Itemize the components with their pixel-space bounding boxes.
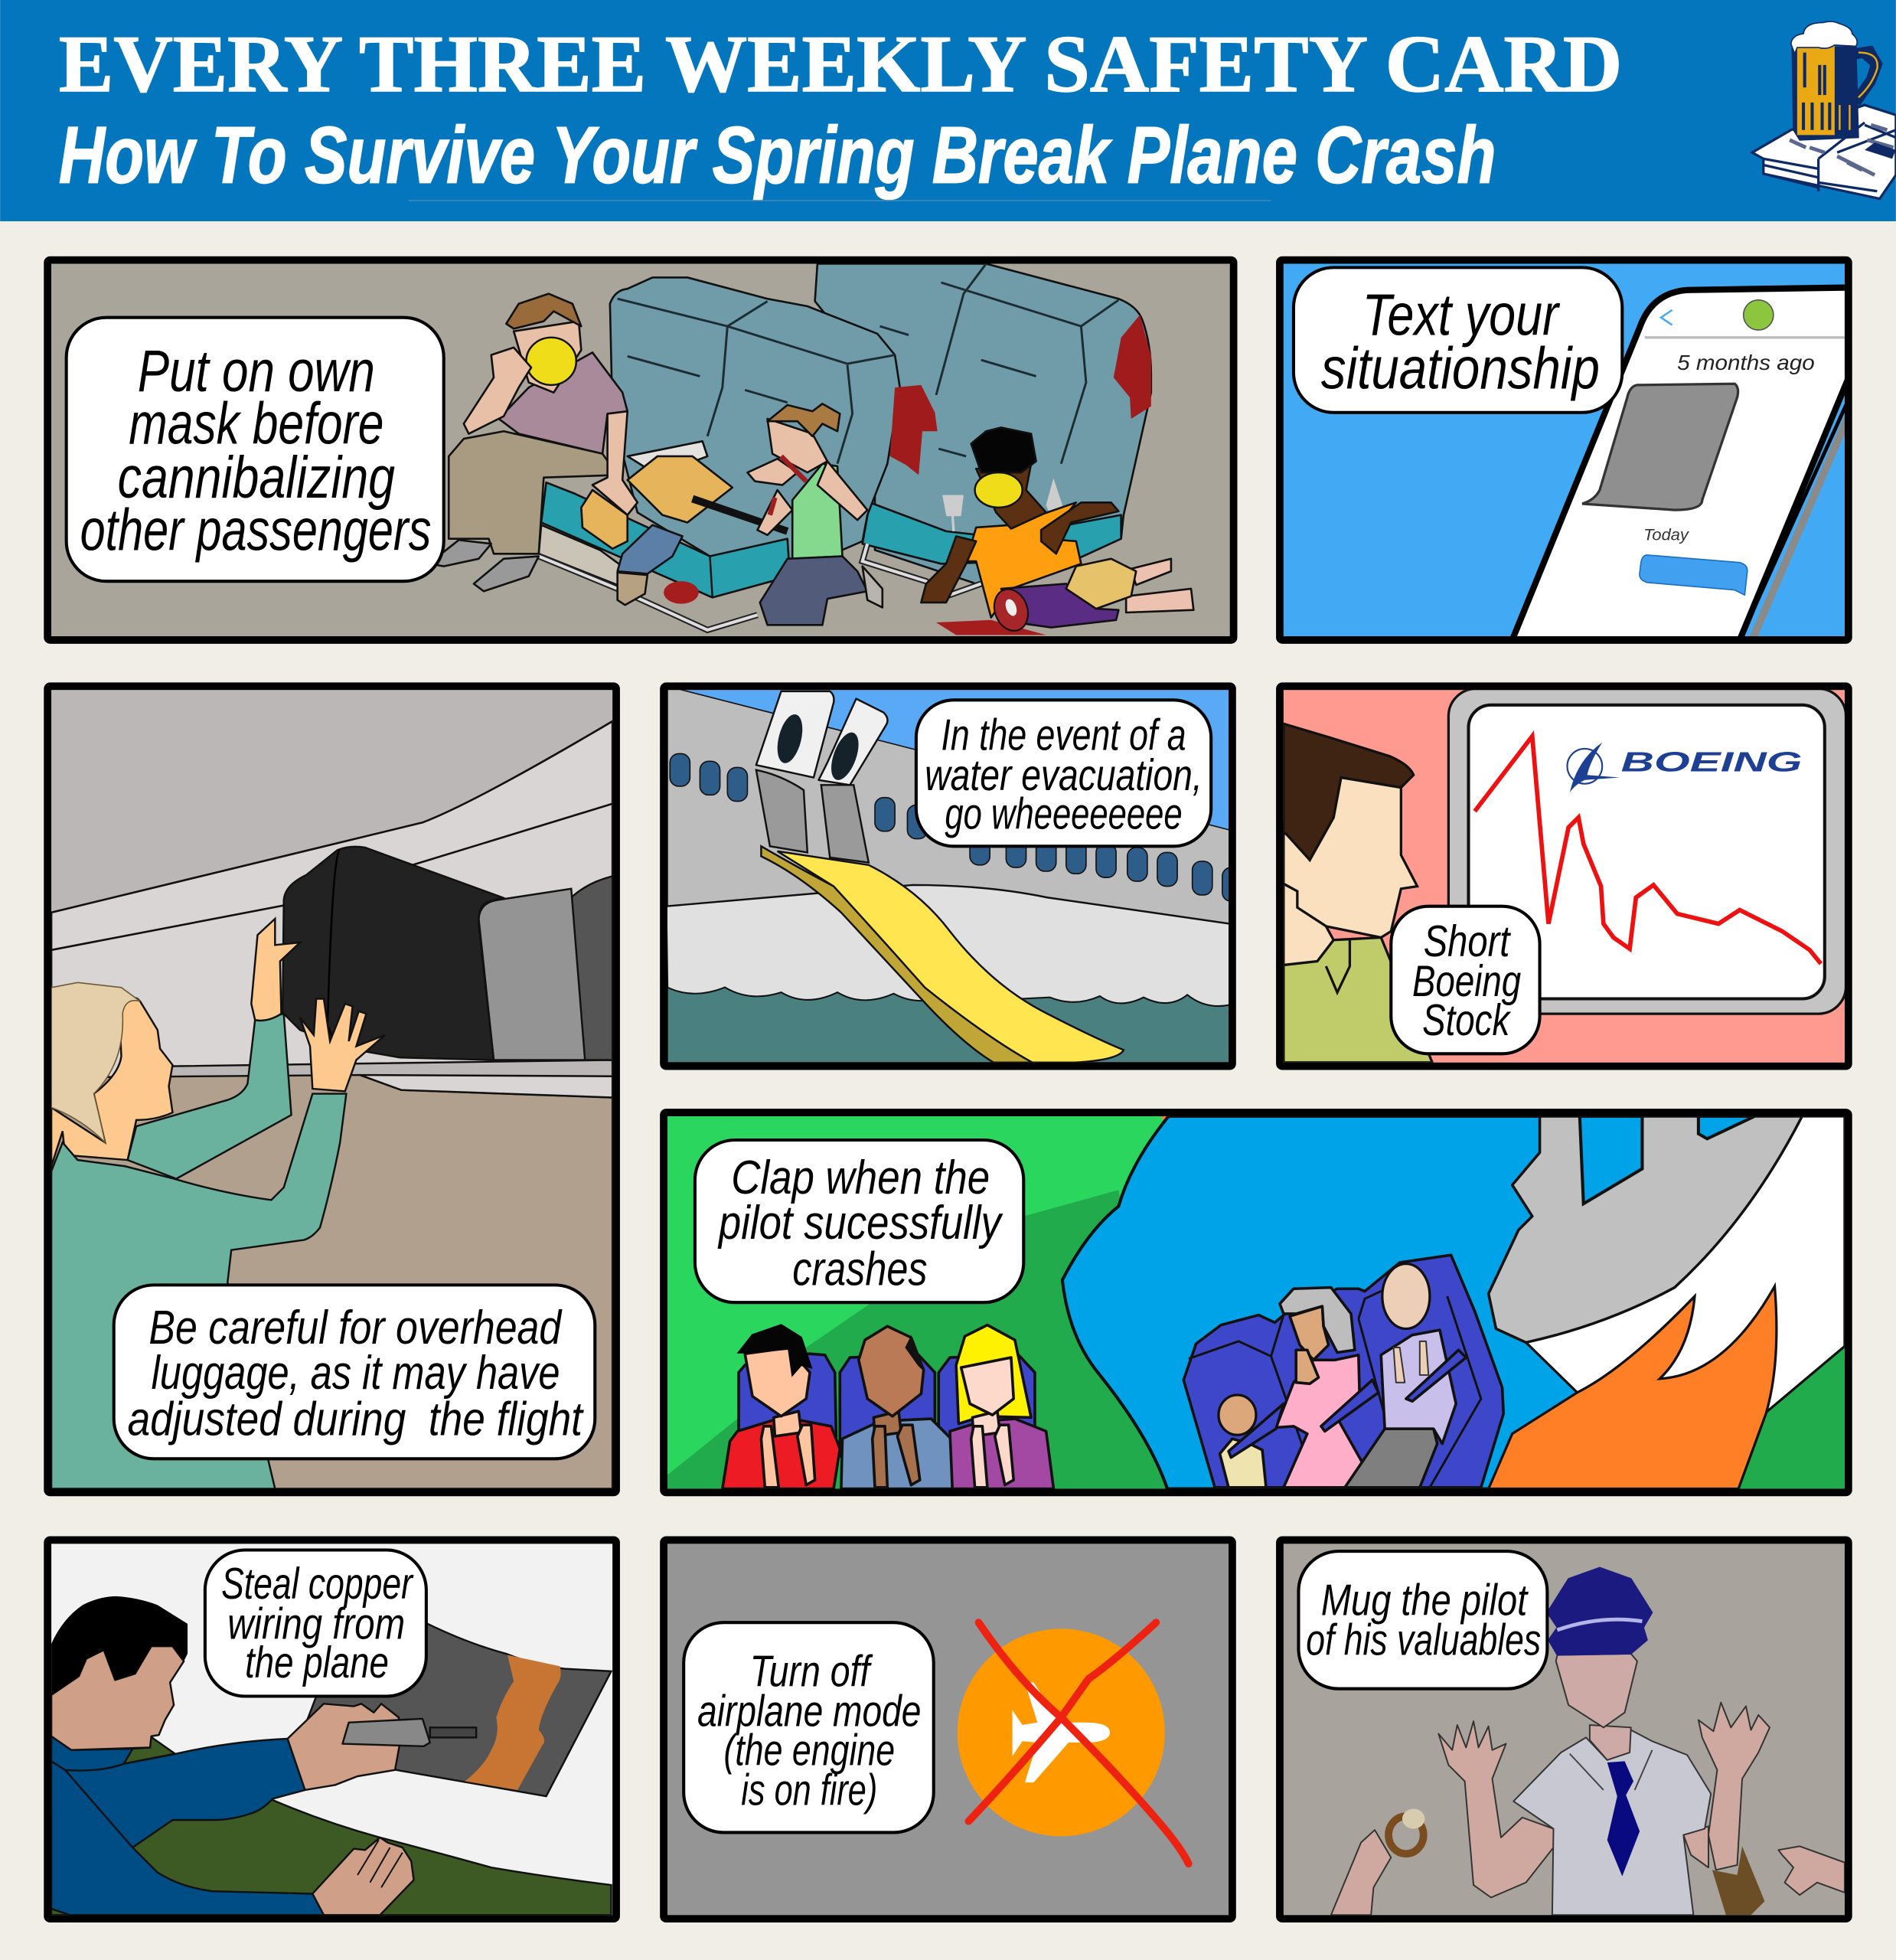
hand with watch (1331, 1830, 1391, 1915)
speech bubble: luggage, as it may have (152, 1347, 560, 1400)
speech bubble (114, 1285, 595, 1459)
speech bubble: Turn off (750, 1647, 873, 1696)
tie (1607, 1761, 1640, 1877)
speech bubble: pilot sucessfully (717, 1197, 1003, 1250)
clapping passengers left (723, 1325, 1053, 1488)
blue message (1640, 555, 1748, 595)
speech bubble: airplane mode (697, 1687, 921, 1736)
speech bubble (684, 1622, 934, 1832)
speech bubble: (the engine (723, 1726, 895, 1775)
blue cabin hole (1062, 1116, 1625, 1488)
man in mask (429, 294, 628, 591)
plane wreck (1489, 1116, 1802, 1342)
speech bubble: crashes (792, 1243, 928, 1295)
praying passengers right (1183, 1255, 1503, 1488)
head (51, 998, 172, 1166)
windows (670, 753, 1242, 901)
panel: text your situationship (1280, 260, 1849, 640)
speech bubble: go wheeeeeeee (945, 789, 1183, 838)
speech bubble: is on fire) (741, 1766, 877, 1815)
speech bubble: Boeing (1412, 957, 1521, 1006)
child with fork (581, 411, 788, 605)
shirt (1513, 1730, 1711, 1915)
speech bubble (67, 318, 444, 581)
girl biting (747, 403, 883, 625)
phone scene: 5 months ago (1677, 351, 1815, 374)
speech bubble: Put on own (138, 339, 375, 404)
torso and front arm (51, 1094, 346, 1488)
flames (1489, 1286, 1777, 1488)
stock line (1475, 737, 1821, 964)
speech bubble: Mug the pilot (1321, 1576, 1529, 1625)
title: EVERY THREE WEEKLY SAFETY CARD (59, 18, 1622, 109)
boeing logo (1567, 743, 1802, 792)
speech bubble: mask before (129, 392, 383, 457)
subtitle: How To Survive Your Spring Break Plane Crash (59, 110, 1496, 200)
panel: put on own mask (47, 260, 1234, 640)
panel: water evacuation (664, 686, 1242, 1067)
scene: passenger lifting luggage (51, 690, 612, 1488)
right cushion (863, 502, 1121, 564)
hat (1547, 1567, 1652, 1655)
grey message (1582, 384, 1738, 510)
panel: short boeing stock (1280, 686, 1849, 1067)
back arm (128, 1014, 292, 1179)
speech bubble: situationship (1321, 337, 1600, 402)
masked passenger with knife and fork (921, 427, 1193, 635)
panel: turn off airplane mode (664, 1540, 1232, 1919)
speech bubble: Text your (1362, 283, 1561, 348)
boeing logo: BOEING (1621, 746, 1802, 777)
speech bubble: Be careful for overhead (148, 1302, 563, 1354)
icon: beer mug on newspapers (1752, 21, 1896, 199)
scene: plane with slide (666, 686, 1242, 1063)
scene: man watching stock chart (1284, 689, 1846, 1063)
front seats (610, 277, 900, 573)
speech bubble (205, 1550, 426, 1697)
speech bubble: cannibalizing (118, 446, 395, 511)
speech bubble (695, 1140, 1023, 1302)
speech bubble: other passengers (80, 498, 431, 563)
panel: overhead luggage (47, 686, 616, 1492)
arms and hands (1438, 1721, 1554, 1897)
monitor (1448, 689, 1846, 1014)
rear seats (815, 263, 1151, 587)
header band (0, 0, 1896, 221)
scene: pilot with hands up (1284, 1544, 1845, 1915)
phone scene (1284, 263, 1849, 640)
speech bubble: water evacuation, (925, 751, 1203, 800)
panel: steal copper wiring (47, 1540, 616, 1919)
left cushion (541, 482, 790, 597)
icon: airplane mode crossed out (958, 1622, 1189, 1864)
speech bubble: In the event of a (941, 711, 1186, 760)
slide (761, 846, 1033, 1063)
wire stripper tool (342, 1719, 476, 1746)
bag (1712, 1846, 1764, 1915)
speech bubble: adjusted during the flight (128, 1393, 584, 1446)
speech bubble: wiring from (227, 1599, 405, 1648)
face and neck (1590, 1725, 1631, 1760)
speech bubble (916, 700, 1211, 846)
cabin scene with passengers (51, 263, 1230, 636)
speech bubble (1298, 1551, 1547, 1689)
phone scene: Today (1643, 526, 1689, 544)
speech bubble (1294, 267, 1622, 413)
scene: crashing cabin (667, 1116, 1845, 1488)
panel: mug the pilot (1280, 1540, 1849, 1919)
panel: clap when the pilot crashes (664, 1112, 1849, 1492)
speech bubble: Clap when the (731, 1152, 990, 1204)
luggage (282, 847, 612, 1060)
status dot (1744, 300, 1774, 330)
speech bubble (1391, 906, 1540, 1054)
speech bubble: Steal copper (221, 1560, 413, 1609)
doors (756, 770, 808, 852)
speech bubble: Stock (1422, 996, 1511, 1045)
man (1284, 724, 1432, 1063)
speech bubble: Short (1424, 917, 1511, 966)
speech bubble: the plane (245, 1638, 389, 1687)
speech bubble: of his valuables (1306, 1616, 1541, 1665)
scene: man stripping wiring (51, 1544, 612, 1915)
